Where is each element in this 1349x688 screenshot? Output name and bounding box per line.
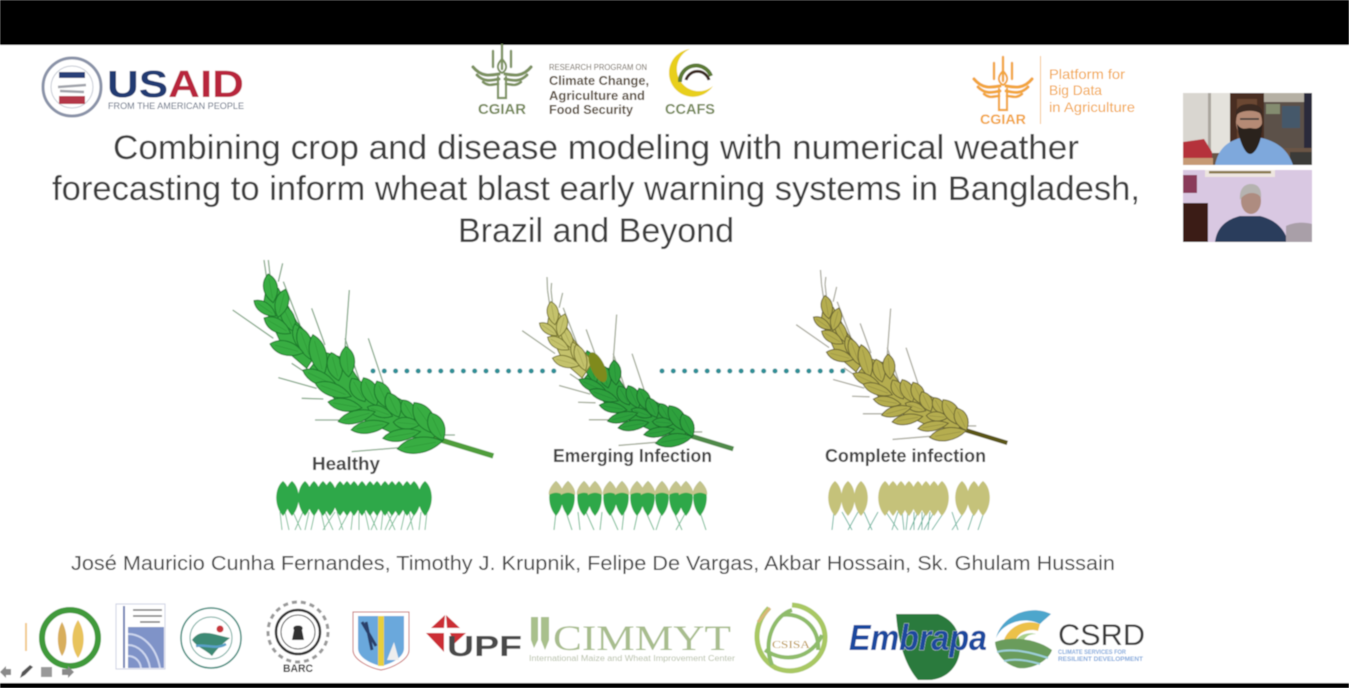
icon: pen [20,665,33,678]
logo: BARC [268,602,328,675]
icon: CGIAR wheat green [473,45,531,98]
icon: USAID seal [43,58,101,116]
webcam: presenter one [1183,93,1312,165]
CSRD name: CSRD [1058,619,1145,652]
logo: meteorological department [116,604,165,669]
wheat field: emerging infection [549,481,707,530]
logo: USAID [43,58,244,116]
research program text: RESEARCH PROGRAM ON [549,63,647,72]
CSRD tagline: CLIMATE SERVICES FOR [1058,650,1127,656]
climate change text: Agriculture and [549,88,645,103]
logo: CIMMYT [529,617,735,663]
title: forecasting to inform wheat blast early warning systems in Bangladesh, [52,170,1140,208]
icon: CCAFS rings [669,49,713,97]
CSRD tagline [1058,650,1143,663]
BARC text: BARC [283,663,313,675]
wheat field: complete infection [828,481,990,530]
climate change text [549,73,649,117]
top black bar [0,0,1349,45]
logo: CSRD [995,610,1145,668]
platform text: Big Data [1049,82,1102,98]
slide toolbar icons [0,665,74,678]
logo: round seal river [181,608,241,668]
climate change text: Climate Change, [549,73,649,88]
wheat spike: healthy [233,260,493,457]
wheat spike: emerging infection [522,277,733,449]
logo: CSISA [757,605,825,671]
icon: back arrow [0,666,11,678]
icon: menu [41,667,52,677]
CIMMYT subtitle: International Maize and Wheat Improvement Center [529,654,735,663]
CGIAR name green: CGIAR [478,101,526,118]
logo: CGIAR Platform for Big Data [974,56,1135,127]
CCAFS name: CCAFS [665,102,715,118]
logo: UPF [426,615,522,663]
wheat field: healthy [276,481,432,530]
bottom black bar [0,683,1349,688]
authors: José Mauricio Cunha Fernandes, Timothy J. Krupnik, Felipe De Vargas, Akbar Hossain, Sk. Ghulam Hussain [71,553,1115,575]
CSRD tagline: RESILIENT DEVELOPMENT [1058,657,1143,663]
partner logos row [25,602,1145,680]
Embrapa name: Embrapa [849,617,987,658]
CGIAR name orange: CGIAR [980,111,1026,127]
icon: forward arrow [62,666,74,678]
CIMMYT name: CIMMYT [553,618,731,658]
logo: Embrapa [849,614,987,680]
title: Brazil and Beyond [458,212,734,250]
UPF text: UPF [447,631,522,663]
USAID tagline: FROM THE AMERICAN PEOPLE [108,101,244,112]
logo: wheat and maize institute [25,610,98,666]
platform text: Platform for [1049,66,1125,82]
logo: shield [353,612,409,670]
climate change text: Food Security [549,102,634,117]
CSISA text: CSISA [772,640,811,651]
dotted connector: healthy to emerging [373,368,560,374]
USAID wordmark: USAID [107,64,244,106]
icon: CGIAR wheat orange [974,57,1032,110]
wheat spike: complete infection [796,270,1007,443]
platform text [1049,66,1135,115]
title [52,129,1140,250]
platform text: in Agriculture [1049,99,1135,115]
label: Emerging Infection: Emerging Infection [553,446,712,466]
label: Healthy: Healthy [312,454,380,474]
title: Combining crop and disease modeling with numerical weather [113,129,1079,167]
lesion [585,350,611,385]
divider [1040,56,1041,124]
label: Complete infection: Complete infection [825,446,986,466]
dotted connector: emerging to complete [662,368,850,374]
logo: CGIAR CCAFS [473,45,715,118]
webcam: presenter two [1183,170,1312,242]
